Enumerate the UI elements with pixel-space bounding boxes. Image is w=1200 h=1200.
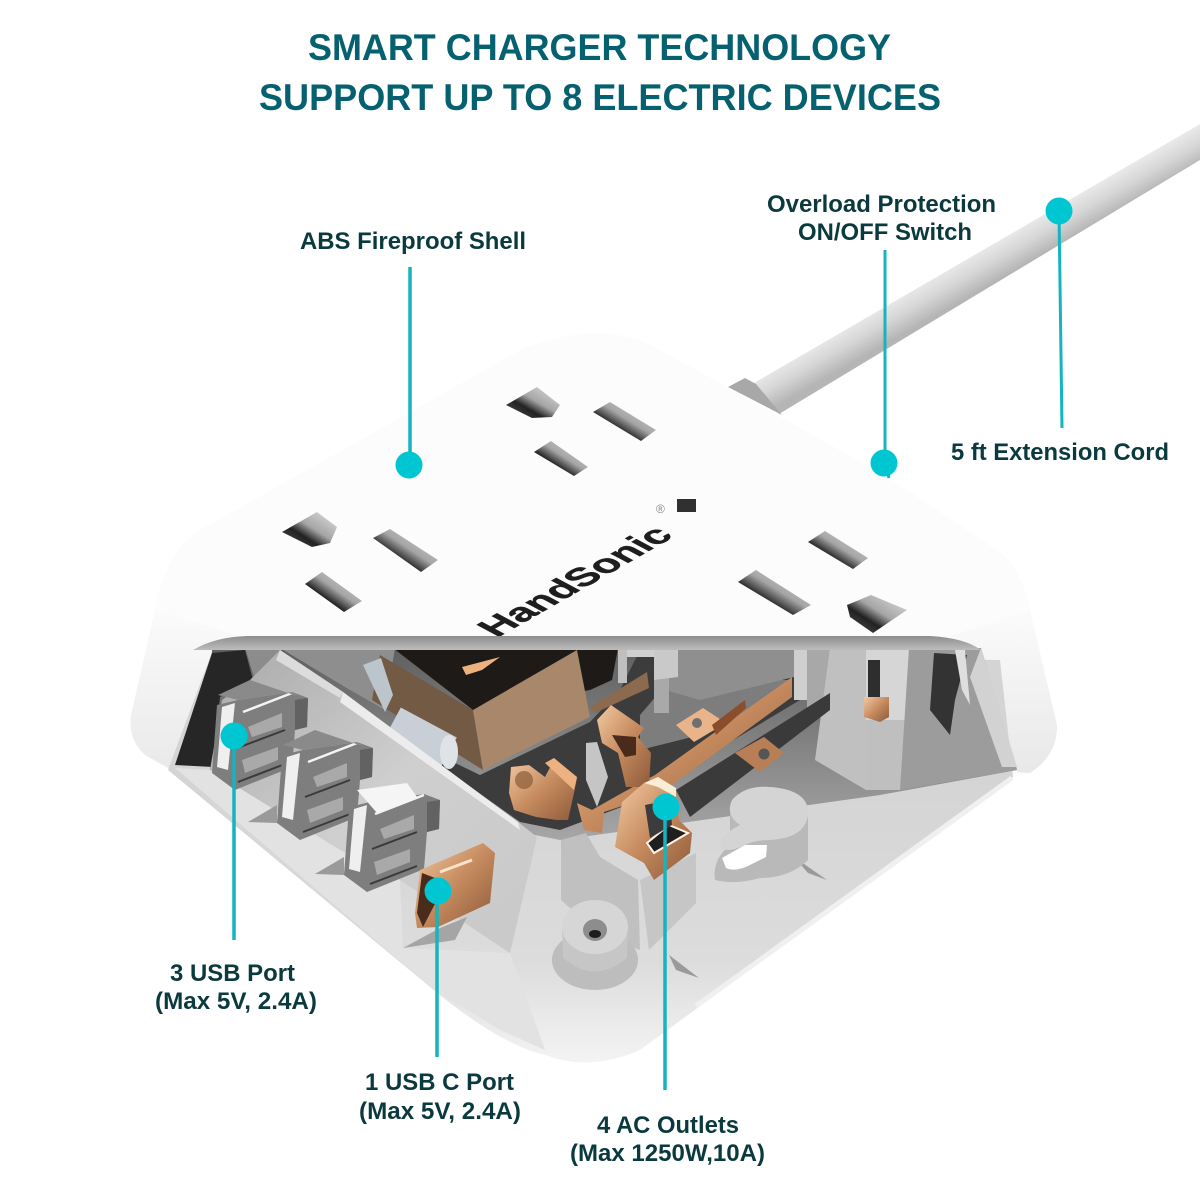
callout: switch: ON/OFF Switch [798, 219, 972, 246]
internal pillars and wall stubs [618, 648, 1017, 790]
black bar [676, 693, 830, 817]
transformer [363, 648, 618, 770]
callout: USB C port [359, 878, 521, 1125]
outlet top [506, 387, 656, 476]
callout: AC outlets [570, 794, 765, 1167]
floor band in front of wall [175, 768, 545, 1050]
power strip illustration [131, 333, 1057, 1062]
outlet right [738, 531, 907, 633]
USB port 1 [212, 692, 308, 790]
callout: USB C port: (Max 5V, 2.4A) [359, 1098, 521, 1125]
USB port 3 [315, 783, 440, 892]
USB C port [403, 843, 495, 948]
title [259, 27, 941, 118]
rear copper bar [590, 672, 649, 713]
copper bus bar [577, 677, 792, 833]
callout: ABS shell [300, 228, 526, 478]
logo square [677, 499, 696, 512]
callout: ABS shell: ABS Fireproof Shell [300, 228, 526, 255]
dark cavity left [175, 650, 253, 767]
callout: USB ports: (Max 5V, 2.4A) [155, 988, 317, 1015]
dark cavity centre [397, 650, 860, 830]
screw post [552, 900, 638, 990]
outlet left [282, 512, 438, 612]
keyhole mount [715, 787, 808, 882]
washer tab 1 [676, 708, 726, 742]
copper clip C [615, 777, 692, 880]
gray posts [561, 742, 827, 978]
title: SUPPORT UP TO 8 ELECTRIC DEVICES [259, 77, 941, 118]
callout: AC outlets: 4 AC Outlets [597, 1112, 739, 1139]
title: SMART CHARGER TECHNOLOGY [308, 27, 891, 68]
shell top face and sides [131, 333, 1057, 777]
callout: AC outlets: (Max 1250W,10A) [570, 1140, 765, 1167]
copper clip B [597, 705, 651, 787]
callout: USB ports [155, 722, 317, 1015]
copper clip A [509, 758, 577, 820]
brand logo: HandSonic [468, 521, 682, 642]
shell front rim [193, 636, 981, 650]
callout: cord [951, 198, 1169, 466]
base floor [168, 652, 1013, 1062]
internal wall board behind USB ports [210, 650, 537, 953]
callout: switch: Overload Protection [767, 191, 996, 218]
USB port 2 [248, 730, 373, 840]
callout: USB ports: 3 USB Port [170, 960, 295, 987]
USB ports [212, 680, 440, 892]
registered mark: ® [656, 502, 665, 516]
dark wedge behind transformer [280, 648, 395, 710]
interior back [210, 648, 1017, 840]
callout: switch [767, 191, 996, 478]
washer tab 2 [735, 737, 784, 772]
extension cord [728, 124, 1200, 415]
AC outlet slots [282, 387, 907, 633]
callout: USB C port: 1 USB C Port [365, 1069, 514, 1096]
callout: cord: 5 ft Extension Cord [951, 439, 1169, 466]
